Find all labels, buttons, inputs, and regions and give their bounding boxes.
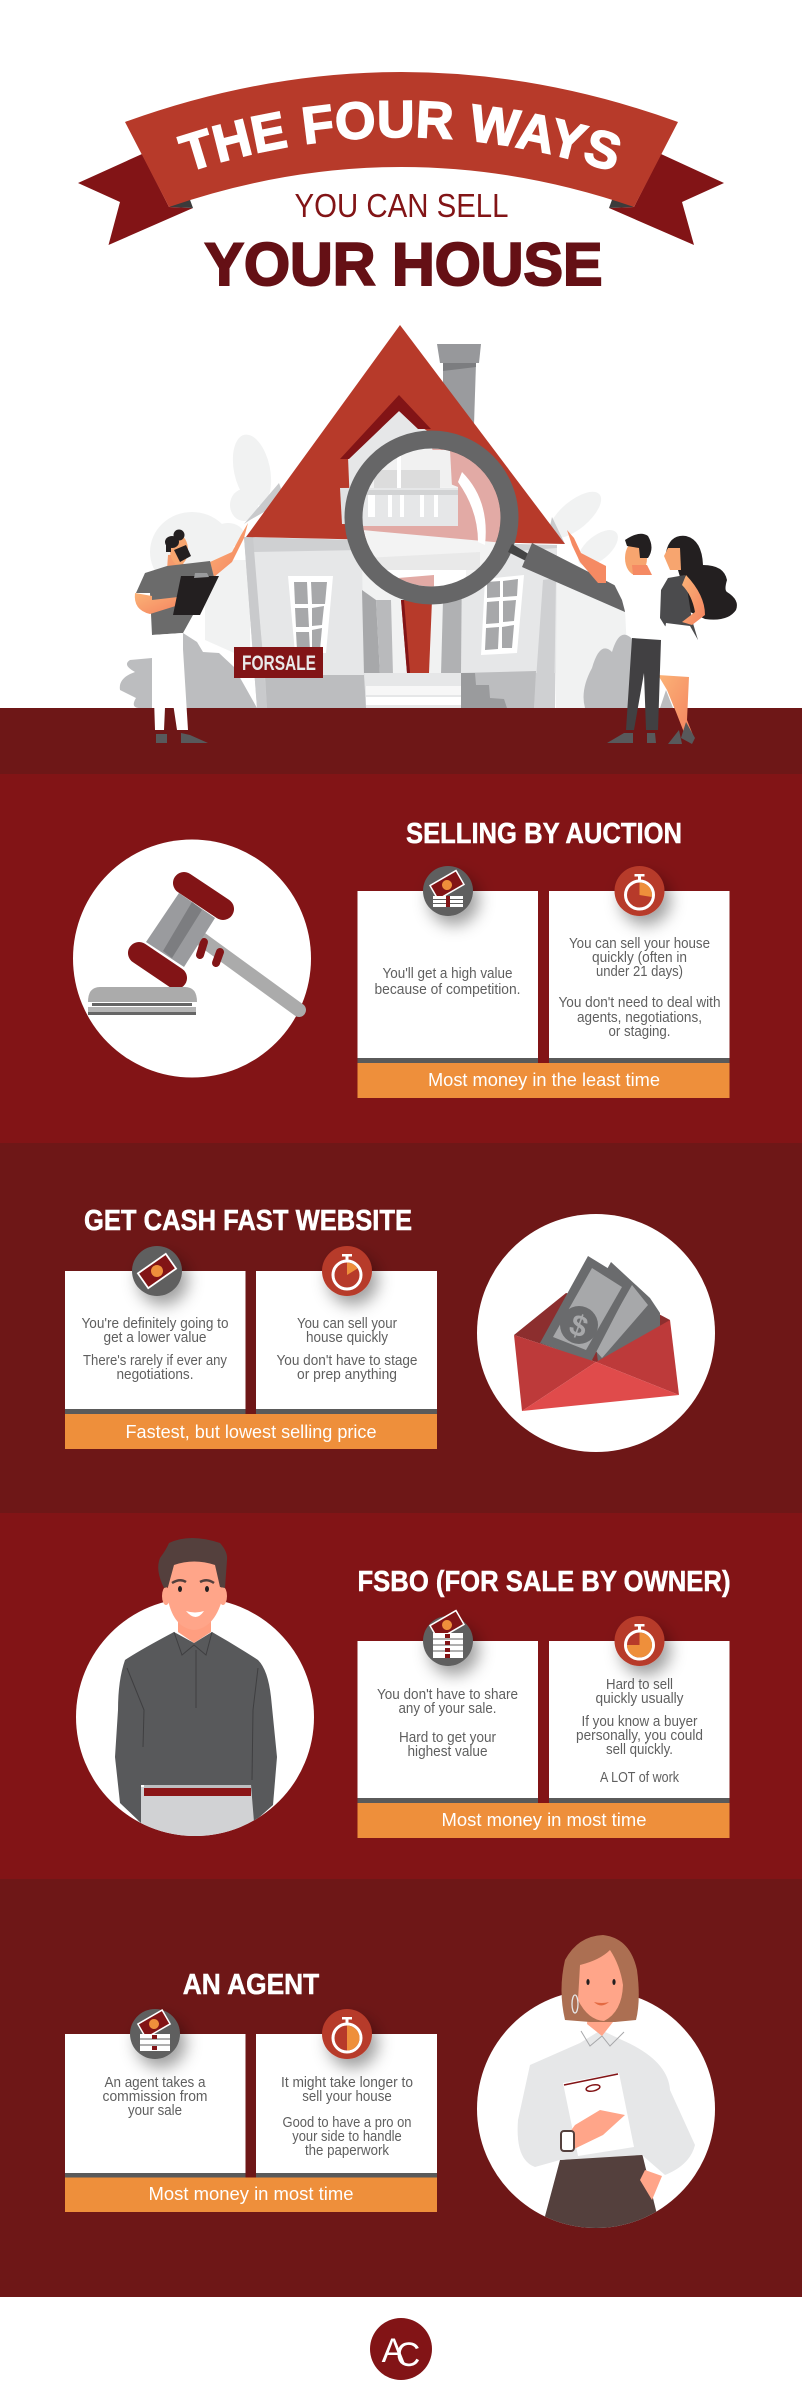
head bbox=[170, 535, 188, 565]
man shoes bbox=[607, 733, 656, 743]
card: money bbox=[65, 1271, 246, 1414]
card: money: Hard to get your bbox=[399, 1730, 496, 1746]
subtitle: your house: YOUR HOUSE bbox=[204, 231, 602, 298]
gavel cap top bbox=[184, 883, 223, 909]
card: time bbox=[256, 1271, 437, 1414]
person: owner bbox=[115, 1538, 277, 1845]
banner fold left bbox=[169, 197, 193, 208]
ground band bbox=[0, 708, 802, 774]
wall body left bbox=[253, 550, 364, 675]
dormer wall bbox=[348, 411, 440, 530]
right hand in pocket bbox=[640, 2170, 662, 2200]
man hair bbox=[625, 534, 652, 558]
card: money: There's rarely if ever any bbox=[83, 1353, 228, 1369]
right wall bbox=[461, 548, 557, 673]
footer logo: C bbox=[396, 2336, 420, 2374]
summary bar: Most money in the least time bbox=[428, 1070, 660, 1090]
forearm bbox=[135, 593, 182, 614]
panel background bbox=[0, 774, 802, 1143]
sweater bbox=[115, 1632, 277, 1823]
clipboard bbox=[173, 576, 219, 615]
person: agent bbox=[518, 1935, 695, 2235]
icon: stopwatch bbox=[322, 1246, 372, 1296]
icon: stopwatch bbox=[614, 1616, 664, 1666]
man arm bbox=[567, 530, 606, 583]
porch bbox=[362, 555, 466, 708]
card: time: personally, you could bbox=[576, 1728, 703, 1744]
summary bar: Fastest, but lowest selling price bbox=[126, 1422, 376, 1442]
neck bbox=[167, 553, 184, 570]
footer logo bbox=[370, 2318, 432, 2380]
card: time: quickly (often in bbox=[592, 950, 687, 966]
woman hair bbox=[666, 536, 737, 620]
panel: selling by auction bbox=[0, 774, 802, 1143]
woman skirt bbox=[658, 623, 698, 677]
heading: GET CASH FAST WEBSITE bbox=[84, 1205, 412, 1237]
banner body bbox=[125, 72, 678, 207]
card: money: An agent takes a bbox=[104, 2075, 206, 2091]
man neck bbox=[632, 565, 652, 575]
card: money: negotiations. bbox=[116, 1367, 194, 1383]
foliage behind house bbox=[150, 431, 630, 708]
card: time: or staging. bbox=[608, 1024, 670, 1040]
summary bar bbox=[358, 1803, 730, 1838]
person: couple bbox=[567, 530, 737, 744]
circle: person backdrop bbox=[76, 1598, 314, 1836]
card: time: Hard to sell bbox=[606, 1677, 673, 1693]
person: man with clipboard bbox=[135, 523, 248, 743]
card: money bbox=[358, 1641, 538, 1803]
subtitle: you can sell: YOU CAN SELL bbox=[294, 187, 508, 224]
footer logo: A bbox=[382, 2332, 405, 2370]
card: money: commission from bbox=[102, 2089, 208, 2105]
summary bar: Most money in most time bbox=[148, 2184, 354, 2204]
icon: envelope with cash bbox=[514, 1256, 679, 1411]
icon: money stack bbox=[423, 1611, 473, 1666]
card: time: your side to handle bbox=[292, 2129, 402, 2145]
woman top bbox=[660, 575, 698, 640]
man head bbox=[625, 541, 647, 575]
ears bbox=[162, 1587, 227, 1605]
eyes bbox=[586, 1979, 616, 1985]
card: money: get a lower value bbox=[104, 1330, 206, 1346]
panel: an agent bbox=[0, 1879, 802, 2297]
right gable sliver bbox=[548, 517, 565, 544]
belt strap bbox=[144, 1788, 251, 1796]
card: money: highest value bbox=[408, 1744, 488, 1760]
side stairs bbox=[461, 673, 507, 708]
lens content bbox=[363, 448, 500, 586]
hair back bbox=[562, 1935, 639, 2022]
envelope bottom flap bbox=[522, 1362, 679, 1411]
dollar seal bbox=[560, 1306, 598, 1345]
mouth bbox=[594, 2002, 609, 2006]
skirt bbox=[545, 2155, 656, 2228]
icon: money stack bbox=[130, 2009, 180, 2059]
icon: stopwatch bbox=[614, 866, 664, 916]
smile bbox=[186, 1611, 204, 1617]
woman arm bbox=[682, 575, 705, 625]
card: money: any of your sale. bbox=[398, 1701, 496, 1717]
card: time: Good to have a pro on bbox=[282, 2115, 412, 2131]
panel: get cash fast website bbox=[0, 1143, 802, 1513]
handle bbox=[522, 543, 625, 612]
card: time: the paperwork bbox=[305, 2143, 390, 2159]
card: time: quickly usually bbox=[596, 1691, 684, 1707]
left gable sliver bbox=[244, 483, 285, 524]
man pants bbox=[626, 638, 661, 730]
card: time: agents, negotiations, bbox=[577, 1010, 702, 1026]
clipboard details bbox=[564, 2074, 618, 2092]
circle: person backdrop bbox=[477, 1990, 715, 2228]
banner tail right bbox=[609, 154, 724, 245]
beard bbox=[174, 545, 191, 562]
icon: gavel bbox=[88, 883, 299, 1015]
summary bar bbox=[358, 1063, 730, 1098]
raised arm bbox=[210, 523, 248, 577]
collar bbox=[581, 2031, 624, 2046]
card: money bbox=[65, 2034, 246, 2178]
balcony bbox=[340, 487, 458, 526]
summary bar bbox=[65, 2178, 437, 2212]
watch bbox=[561, 2131, 574, 2151]
card: money: You're definitely going to bbox=[82, 1316, 228, 1332]
for sale sign: FORSALE bbox=[242, 652, 316, 675]
torso bbox=[136, 561, 214, 635]
summary bar: Most money in most time bbox=[442, 1810, 646, 1830]
roof bbox=[246, 325, 565, 544]
card: money: You don't have to share bbox=[377, 1687, 518, 1703]
pants bbox=[138, 1787, 257, 1836]
card: time: house quickly bbox=[306, 1330, 389, 1346]
back notes bbox=[590, 1262, 660, 1362]
magnifier bbox=[354, 440, 625, 612]
earring bbox=[572, 1995, 578, 2013]
curved heading path text: THE FOUR WAYS bbox=[176, 100, 620, 170]
shoes bbox=[156, 733, 208, 743]
circle: gavel backdrop bbox=[73, 840, 311, 1078]
panel background bbox=[0, 1513, 802, 1879]
hero illustration: house bbox=[120, 325, 673, 708]
card: time: You don't have to stage bbox=[276, 1353, 418, 1369]
card: time: sell quickly. bbox=[606, 1742, 673, 1758]
hair bbox=[165, 530, 184, 552]
hair bbox=[158, 1538, 227, 1588]
card: time: It might take longer to bbox=[281, 2075, 413, 2091]
woman face bbox=[664, 548, 681, 570]
steps bbox=[364, 673, 461, 708]
banner tail left bbox=[78, 154, 193, 245]
dollar seal: $ bbox=[565, 1308, 592, 1345]
card: time: You can sell your house bbox=[569, 936, 710, 952]
door bbox=[401, 600, 432, 673]
shirt bbox=[518, 2030, 695, 2175]
heading: AN AGENT bbox=[183, 1969, 320, 2001]
gavel base bbox=[88, 987, 197, 1002]
chimney bbox=[437, 344, 481, 425]
left bush bbox=[183, 633, 257, 708]
card: time: or prep anything bbox=[297, 1367, 397, 1383]
gavel cap bottom bbox=[139, 953, 176, 978]
sweater folds bbox=[127, 1632, 258, 1780]
envelope left flap bbox=[514, 1335, 596, 1411]
face bbox=[168, 1558, 222, 1630]
envelope right flap bbox=[596, 1320, 679, 1395]
card: time: You don't need to deal with bbox=[558, 995, 720, 1011]
belt bbox=[144, 1785, 251, 1788]
card: time: If you know a buyer bbox=[582, 1714, 698, 1730]
card: time bbox=[549, 891, 730, 1063]
left window bbox=[288, 576, 333, 653]
right window bbox=[481, 575, 524, 655]
icon: money stack bbox=[423, 866, 473, 916]
heading: SELLING BY AUCTION bbox=[406, 818, 682, 850]
eyes bbox=[178, 1586, 209, 1592]
for sale sign bbox=[234, 647, 323, 678]
panel background bbox=[0, 1143, 802, 1513]
gavel head bbox=[146, 893, 215, 967]
heading: FSBO (FOR SALE BY OWNER) bbox=[358, 1566, 730, 1598]
clipboard clip bbox=[194, 573, 209, 578]
neck bbox=[587, 2022, 613, 2036]
woman heels bbox=[668, 722, 695, 744]
card: time: under 21 days) bbox=[596, 964, 683, 980]
face bbox=[578, 1950, 623, 2021]
right bush bbox=[584, 635, 673, 708]
envelope back bbox=[514, 1293, 670, 1362]
neck bbox=[178, 1622, 211, 1643]
panel background bbox=[0, 1879, 802, 2297]
card: time: You can sell your bbox=[297, 1316, 397, 1332]
handle connector bbox=[508, 544, 532, 562]
card: time bbox=[256, 2034, 437, 2178]
gavel rings bbox=[200, 942, 220, 963]
right pillar bbox=[534, 578, 556, 708]
circle: envelope backdrop bbox=[477, 1214, 715, 1452]
title banner bbox=[78, 72, 724, 245]
woman legs bbox=[658, 675, 693, 735]
card: money: You'll get a high value bbox=[382, 966, 512, 982]
arm and hand bbox=[572, 2110, 625, 2149]
house wall bbox=[244, 537, 557, 708]
wall base left bbox=[265, 675, 366, 708]
card: money: because of competition. bbox=[374, 982, 520, 998]
lens ring bbox=[354, 440, 510, 596]
card: money: your sale bbox=[128, 2103, 182, 2119]
wall base right bbox=[461, 671, 536, 708]
dormer frame bbox=[340, 395, 431, 459]
card: money bbox=[358, 891, 538, 1063]
gavel handle bbox=[200, 938, 299, 1010]
clipboard bbox=[563, 2073, 634, 2156]
icon: stopwatch bbox=[322, 2009, 372, 2059]
man shirt bbox=[606, 567, 662, 640]
card: time: sell your house bbox=[302, 2089, 392, 2105]
pants bbox=[152, 633, 188, 730]
front note bbox=[540, 1256, 632, 1362]
small left bush bbox=[120, 658, 152, 708]
card: time: A LOT of work bbox=[600, 1770, 680, 1786]
card: time bbox=[549, 1641, 730, 1803]
summary bar bbox=[65, 1414, 437, 1449]
left pillar bbox=[244, 537, 267, 708]
icon: banknote bbox=[132, 1246, 182, 1296]
brows bbox=[172, 1580, 214, 1583]
panel: fsbo bbox=[0, 1513, 802, 1879]
banner fold right bbox=[609, 197, 634, 208]
